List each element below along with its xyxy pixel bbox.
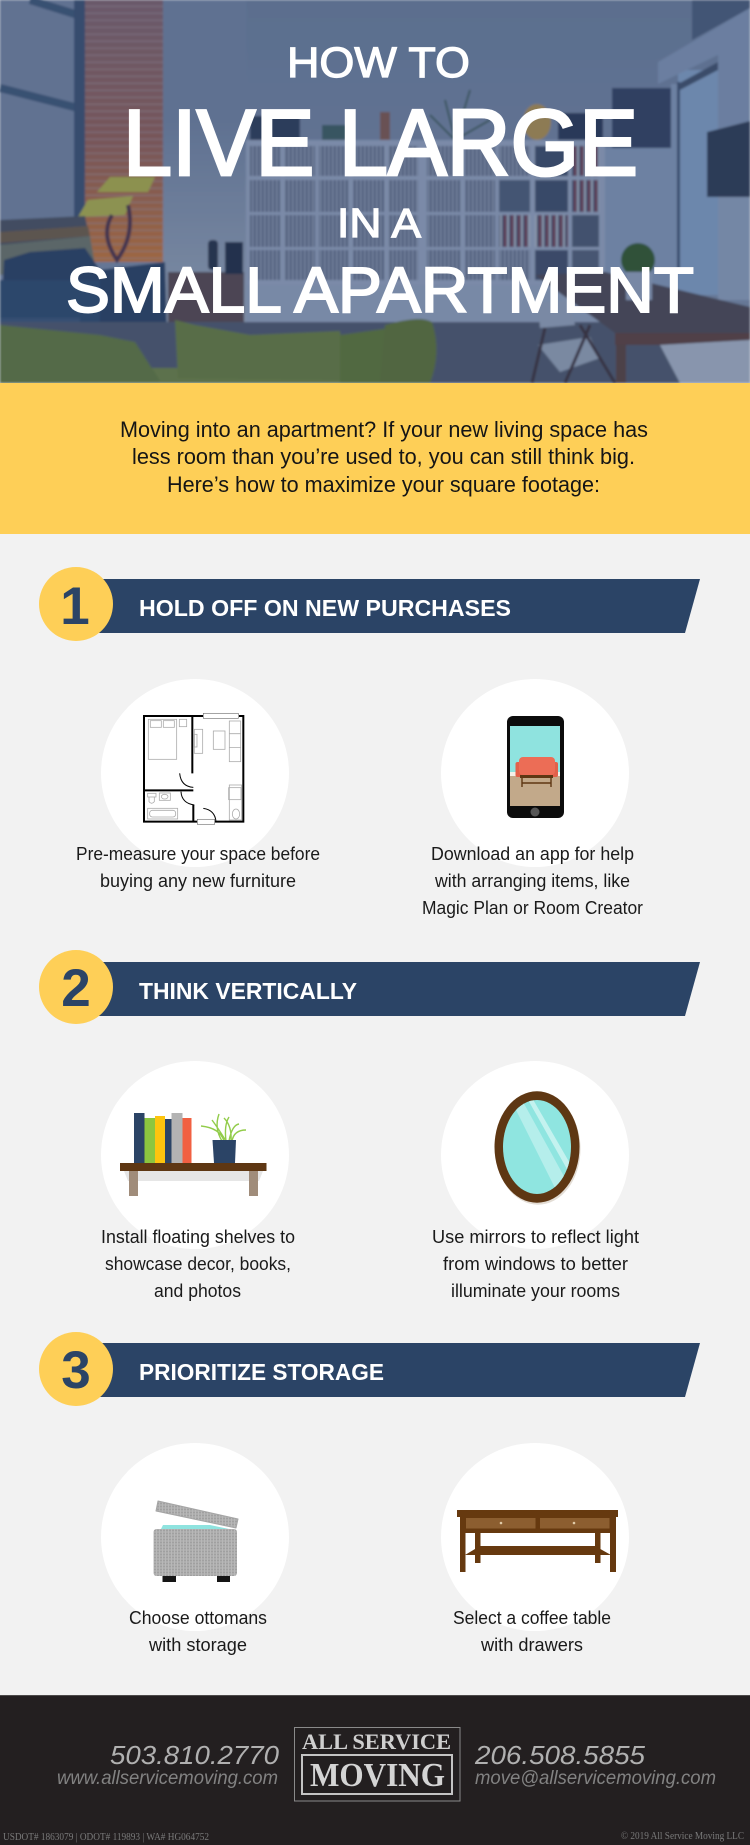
title: SMALL APARTMENT bbox=[66, 254, 694, 326]
section 1 heading bbox=[39, 567, 700, 641]
contact: Washington: move@allservicemoving.com bbox=[475, 1768, 716, 1789]
caption: with storage bbox=[148, 1635, 247, 1655]
intro text: Moving into an apartment? If your new living space has bbox=[120, 417, 648, 442]
caption: Select a coffee table bbox=[453, 1608, 611, 1628]
item: ottomans bbox=[101, 1443, 289, 1655]
icon: oval mirror bbox=[494, 1091, 580, 1205]
intro text: less room than you’re used to, you can still think big. bbox=[132, 444, 635, 469]
contact: Oregon: 503.810.2770 bbox=[110, 1740, 280, 1770]
section 3 heading bbox=[39, 1332, 700, 1406]
contact: Oregon: www.allservicemoving.com bbox=[57, 1768, 278, 1789]
icon: phone bbox=[507, 716, 564, 818]
lamp bbox=[97, 177, 155, 192]
copyright: © 2019 All Service Moving LLC bbox=[621, 1831, 744, 1842]
wall art bbox=[612, 88, 671, 148]
caption: Choose ottomans bbox=[129, 1608, 267, 1628]
intro band bbox=[0, 383, 750, 534]
title: IN A bbox=[337, 200, 422, 246]
caption: Use mirrors to reflect light bbox=[432, 1227, 639, 1247]
green sofa bbox=[0, 368, 400, 383]
caption: Pre-measure your space before bbox=[76, 844, 320, 864]
section 2 heading: 2 bbox=[61, 959, 91, 1018]
caption bbox=[432, 1227, 639, 1301]
bookcase bbox=[246, 140, 605, 324]
title bbox=[66, 39, 694, 326]
caption bbox=[422, 844, 643, 918]
right wall, beam, door and TV bbox=[605, 148, 678, 294]
side table bbox=[168, 272, 244, 328]
section 1 heading: 1 bbox=[60, 577, 90, 636]
item: coffee table bbox=[441, 1443, 629, 1655]
title: HOW TO bbox=[287, 39, 470, 87]
caption: and photos bbox=[154, 1281, 241, 1301]
header: photo of a loft apartment with blue overlay bbox=[0, 0, 750, 383]
logo: MOVING bbox=[310, 1757, 445, 1794]
caption: Download an app for help bbox=[431, 844, 634, 864]
icon: storage ottoman bbox=[154, 1501, 238, 1582]
section 2 heading bbox=[39, 950, 700, 1024]
brick bbox=[85, 0, 163, 262]
caption: with drawers bbox=[480, 1635, 583, 1655]
caption: from windows to better bbox=[443, 1254, 628, 1274]
title: LIVE LARGE bbox=[123, 90, 638, 195]
caption: showcase decor, books, bbox=[105, 1254, 291, 1274]
section 3 heading: 3 bbox=[61, 1341, 91, 1400]
caption: buying any new furniture bbox=[100, 871, 296, 891]
caption: Magic Plan or Room Creator bbox=[422, 898, 643, 918]
intro text: Here’s how to maximize your square footage: bbox=[167, 472, 600, 497]
item: floating shelves bbox=[101, 1061, 295, 1301]
caption bbox=[453, 1608, 611, 1655]
window bbox=[0, 0, 85, 240]
logo bbox=[294, 1728, 460, 1801]
contact: Washington bbox=[474, 1740, 716, 1789]
item: download an app bbox=[422, 679, 643, 918]
sill and ledge bbox=[0, 216, 90, 245]
icon: floor plan bbox=[144, 713, 243, 824]
footer bbox=[0, 1695, 750, 1845]
licence numbers: USDOT# 1863079 | ODOT# 119893 | WA# HG064752 bbox=[3, 1832, 209, 1843]
caption: illuminate your rooms bbox=[451, 1281, 620, 1301]
intro text bbox=[120, 417, 648, 497]
section 3 heading: PRIORITIZE STORAGE bbox=[139, 1359, 384, 1385]
caption: with arranging items, like bbox=[434, 871, 630, 891]
icon: coffee table with drawers bbox=[457, 1510, 618, 1572]
caption: Install floating shelves to bbox=[101, 1227, 295, 1247]
item: mirrors bbox=[432, 1061, 639, 1301]
contact: Oregon bbox=[57, 1740, 280, 1789]
caption bbox=[129, 1608, 267, 1655]
items on top of bookcase bbox=[250, 116, 300, 140]
pale column by wall bbox=[163, 120, 246, 330]
contact: Washington: 206.508.5855 bbox=[474, 1740, 646, 1770]
logo: ALL SERVICE bbox=[302, 1729, 451, 1754]
caption bbox=[76, 844, 320, 891]
dining table, plant and chairs bbox=[535, 272, 750, 333]
floor bbox=[0, 322, 750, 383]
icon: shelf with books and plant bbox=[120, 1113, 266, 1196]
item: pre-measure bbox=[76, 679, 320, 891]
blue armchair bbox=[0, 248, 167, 335]
section 2 heading: THINK VERTICALLY bbox=[139, 978, 357, 1004]
section 1 heading: HOLD OFF ON NEW PURCHASES bbox=[139, 595, 511, 621]
caption bbox=[101, 1227, 295, 1301]
